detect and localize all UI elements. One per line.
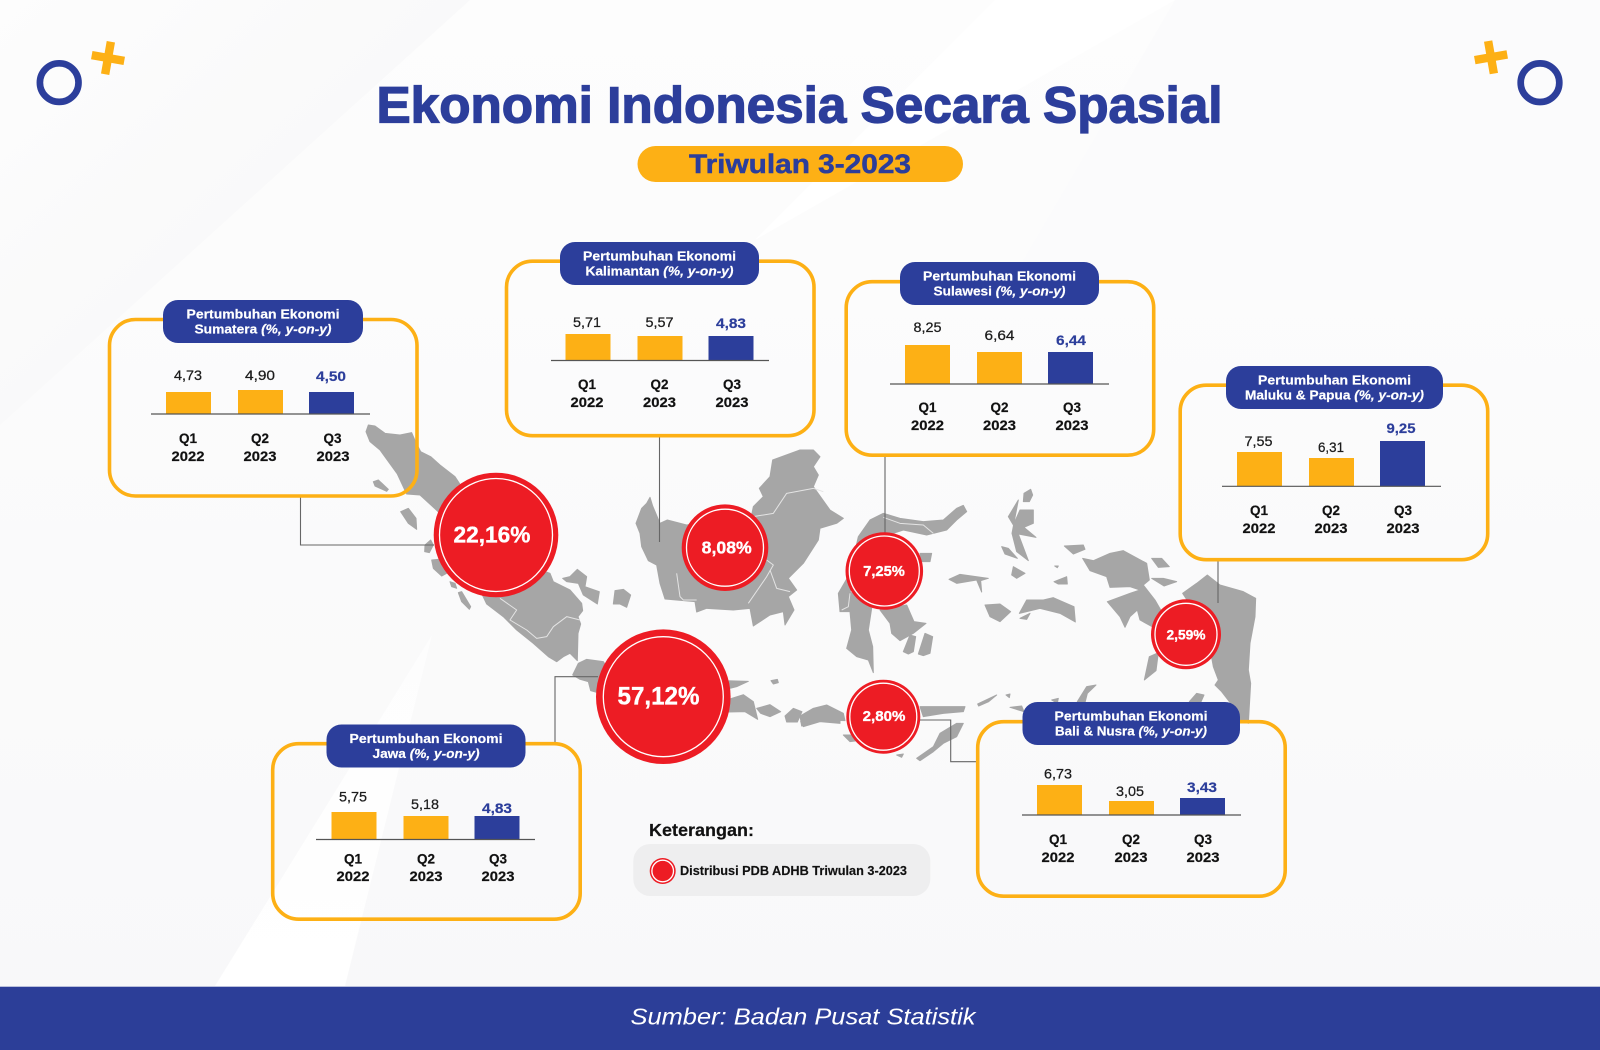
bar chart: Jawa: 2023 [410,869,443,884]
footer source bar: Sumber: Badan Pusat Statistik [630,1004,977,1030]
connector: Jawa [555,677,598,743]
legend: Keterangan: [649,820,754,840]
icon: circle and plus top right [1472,38,1559,102]
bar chart: Sumatera: 2022 [172,449,204,464]
panel: Bali dan Nusra [978,702,1285,896]
panel heading: Sumatera: Pertumbuhan Ekonomi [186,306,340,322]
bar chart: Sulawesi: 2022 [911,418,944,433]
map of Indonesia [366,425,1256,761]
bar chart: Sumatera [151,367,370,464]
panel heading: Bali dan Nusra: Bali & Nusra (%, y-on-y) [1055,724,1207,739]
connector: Kalimantan [658,436,660,542]
bar chart: Sulawesi: 2023 [1056,418,1089,433]
panel heading: Maluku dan Papua: Pertumbuhan Ekonomi [1258,372,1411,388]
bar chart: Sumatera: Q3 [323,431,342,446]
bar chart: Maluku dan Papua: 7,55 [1244,433,1273,449]
bar chart: Sumatera: 4,90 [245,367,275,383]
bar chart: Jawa: 4,83 [482,800,512,816]
bar chart: Bali dan Nusra: Q2 [1122,832,1140,847]
bar chart: Kalimantan [551,314,769,410]
bubble: Jawa 57,12%: 57,12% [618,682,700,710]
bar chart: Jawa: Q1 [344,852,362,866]
bubble: Kalimantan 8,08%: 8,08% [702,537,752,557]
bar chart: Sumatera: 2023 [316,449,350,464]
panel heading: Bali dan Nusra: Pertumbuhan Ekonomi [1054,708,1208,724]
bar chart: Maluku dan Papua: 2023 [1386,521,1420,536]
bar chart: Sumatera: 4,50 [316,368,346,384]
bar chart: Bali dan Nusra [1022,766,1241,865]
bubble: Maluku dan Papua 2,59% [1151,599,1221,669]
bar chart: Maluku dan Papua: Q3 [1394,503,1412,518]
bubble: Kalimantan 8,08% [682,504,768,591]
panel: Kalimantan [506,242,814,436]
panel heading: Sulawesi [900,262,1099,305]
legend [633,820,930,896]
connector: Sulawesi [884,456,886,534]
connector: Bali dan Nusra [920,720,976,762]
bar chart: Bali dan Nusra: 6,73 [1044,766,1072,782]
panel heading: Sulawesi: Sulawesi (%, y-on-y) [934,284,1066,299]
bar chart: Sulawesi: Q1 [918,400,937,415]
bar chart: Maluku dan Papua: 9,25 [1386,420,1416,436]
bar chart: Sumatera: 4,73 [174,367,202,383]
panel heading: Maluku dan Papua [1226,366,1443,409]
bar chart: Bali dan Nusra: Q3 [1194,832,1212,847]
panel heading: Kalimantan: Pertumbuhan Ekonomi [583,248,736,264]
bar chart: Sulawesi: Q2 [990,400,1009,415]
bar chart: Kalimantan: 2023 [716,395,749,410]
panel heading: Jawa [326,724,526,768]
bubble: Maluku dan Papua 2,59%: 2,59% [1166,627,1206,642]
bar chart: Maluku dan Papua [1222,420,1441,536]
legend: Distribusi PDB ADHB Triwulan 3-2023 [680,863,907,878]
bar chart: Kalimantan: 5,71 [573,314,601,330]
bar chart: Bali dan Nusra: 2023 [1186,850,1220,865]
bar chart: Bali dan Nusra: 3,43 [1187,779,1217,795]
subtitle badge: Triwulan 3-2023 [689,149,911,179]
map: Sulawesi, Nusa Tenggara, Maluku and Papua [800,489,1256,761]
bar chart: Maluku dan Papua: Q2 [1322,503,1340,518]
bar chart: Kalimantan: Q3 [723,377,741,392]
bar chart: Sulawesi: 6,44 [1056,332,1086,348]
panel heading: Bali dan Nusra [1022,702,1240,745]
bar chart: Bali dan Nusra: 3,05 [1116,783,1144,799]
bar chart: Jawa [316,788,535,884]
panel heading: Jawa: Jawa (%, y-on-y) [372,746,480,761]
panel heading: Maluku dan Papua: Maluku & Papua (%, y-on-y) [1245,388,1424,403]
panel heading: Kalimantan: Kalimantan (%, y-on-y) [586,264,734,279]
bar chart: Jawa: Q3 [489,852,507,866]
bubble: Sulawesi 7,25%: 7,25% [863,564,905,580]
bar chart: Sumatera: Q2 [251,431,269,446]
bar chart: Kalimantan: 4,83 [716,315,746,331]
bubble: Sumatera 22,16% [434,473,558,597]
bar chart: Sumatera: 2023 [244,449,277,464]
bar chart: Sulawesi: Q3 [1063,400,1081,415]
bar chart: Kalimantan: 2023 [643,395,677,410]
bar chart: Jawa: 5,18 [411,796,439,812]
bubble: Sumatera 22,16%: 22,16% [454,522,530,548]
bar chart: Bali dan Nusra: Q1 [1049,832,1067,847]
panel heading: Sulawesi: Pertumbuhan Ekonomi [923,268,1076,284]
bar chart: Sulawesi: 6,64 [984,327,1015,343]
panel heading: Sumatera [163,300,363,343]
bubble: Bali dan Nusra 2,80%: 2,80% [863,708,905,725]
map: Sumatra and Kalimantan and Java [366,425,843,727]
bubble: Jawa 57,12% [596,629,731,764]
bar chart: Jawa: 2023 [482,869,515,884]
bar chart: Maluku dan Papua: 6,31 [1318,439,1344,455]
bar chart: Jawa: Q2 [417,852,435,866]
footer source bar [0,987,1600,1050]
bar chart: Kalimantan: 2022 [570,395,604,410]
bar chart: Sulawesi: 8,25 [914,319,942,335]
connector: Maluku dan Papua [1217,560,1219,603]
panel: Sulawesi [846,262,1154,455]
panel heading: Jawa: Pertumbuhan Ekonomi [350,731,502,746]
bar chart: Kalimantan: Q2 [650,377,669,392]
panel heading: Kalimantan [560,242,759,285]
bar chart: Kalimantan: 5,57 [646,314,674,330]
bar chart: Sumatera: Q1 [179,431,197,446]
title: Ekonomi Indonesia Secara Spasial [376,76,1222,134]
bar chart: Maluku dan Papua: Q1 [1250,503,1268,518]
bar chart: Maluku dan Papua: 2022 [1242,521,1276,536]
connector: Sumatera [300,497,434,545]
panel: Maluku dan Papua [1180,366,1488,560]
panel: Sumatera [110,300,417,496]
panel heading: Sumatera: Sumatera (%, y-on-y) [194,322,332,337]
bar chart: Jawa: 2022 [336,869,370,884]
bar chart: Bali dan Nusra: 2022 [1042,850,1074,865]
bar chart: Kalimantan: Q1 [578,377,596,392]
bubble: Bali dan Nusra 2,80% [846,680,920,754]
subtitle badge [638,146,963,182]
bar chart: Jawa: 5,75 [339,788,367,804]
bar chart: Sulawesi [890,319,1109,433]
bar chart: Maluku dan Papua: 2023 [1314,521,1348,536]
bar chart: Sulawesi: 2023 [983,418,1017,433]
bubble: Sulawesi 7,25% [846,532,923,610]
panel: Jawa [273,724,580,919]
icon: circle and plus top left [40,39,127,102]
bar chart: Bali dan Nusra: 2023 [1114,850,1148,865]
